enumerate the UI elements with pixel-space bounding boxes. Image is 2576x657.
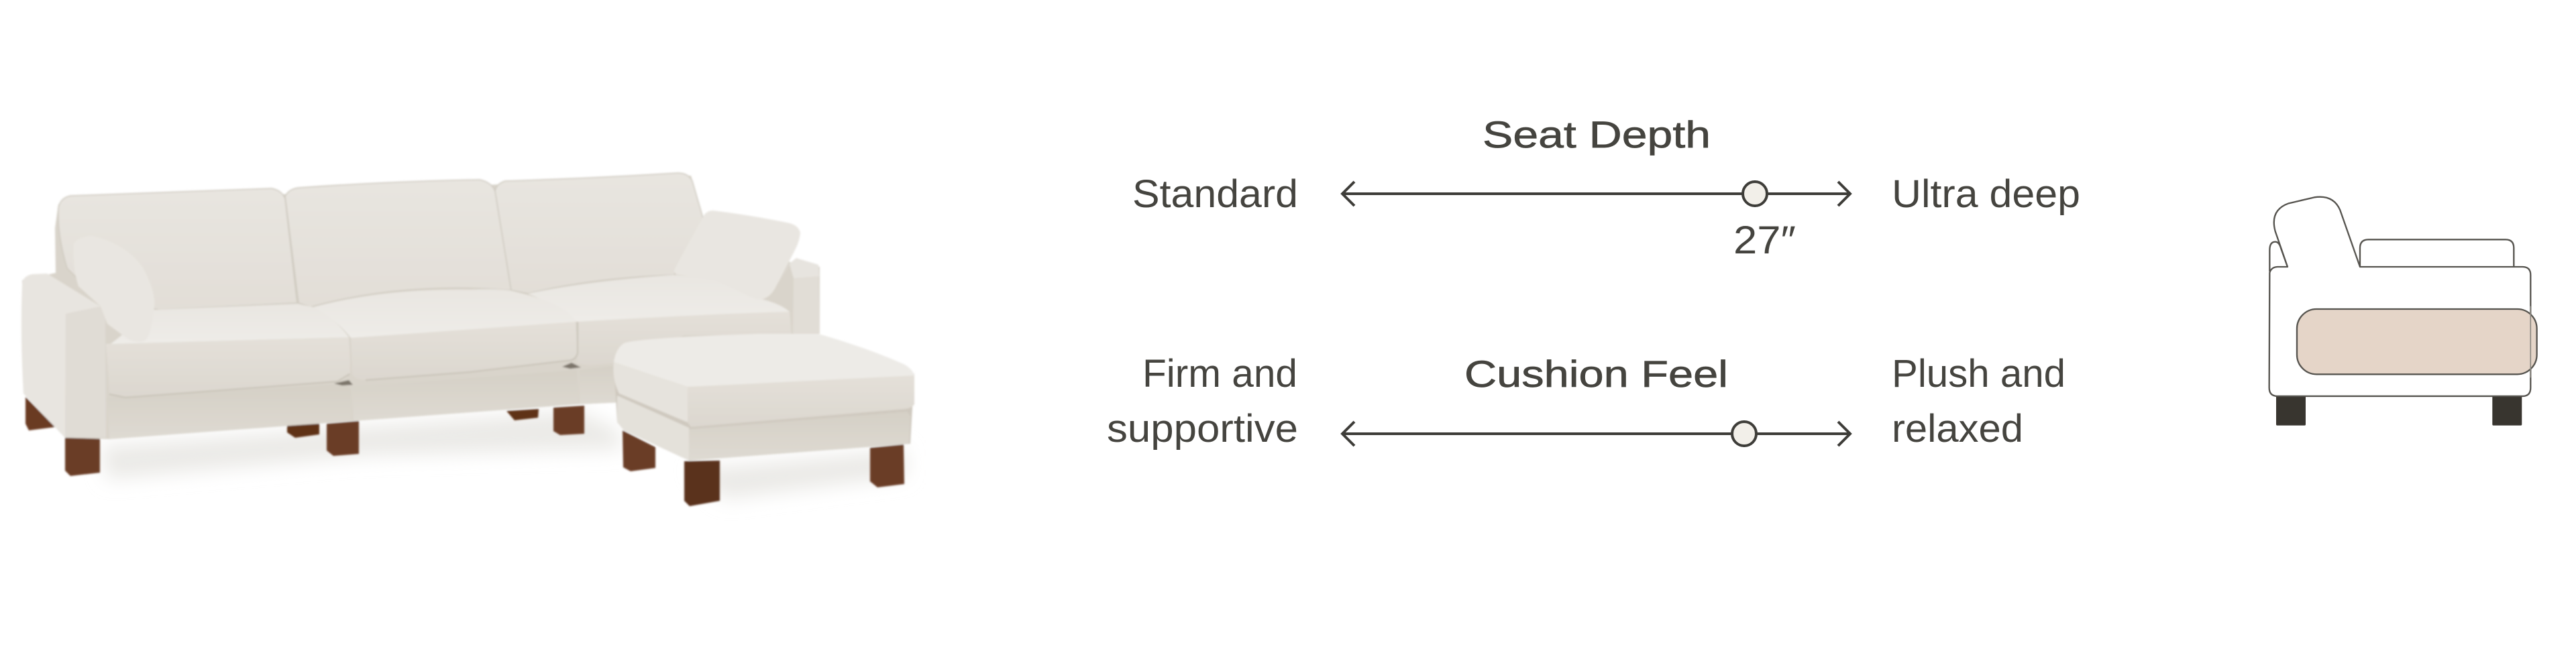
left pillow <box>74 236 154 342</box>
ottoman cushion <box>613 334 914 427</box>
marker: cushion feel position <box>1732 422 1756 446</box>
heading: seat depth: Seat Depth <box>1483 113 1711 156</box>
label: plush and relaxed <box>1892 352 2065 451</box>
sofa right arm <box>771 258 820 334</box>
label: ultra deep: Ultra deep <box>1892 172 2080 216</box>
label: firm and supportive <box>1107 352 1298 451</box>
ottoman base <box>617 396 910 461</box>
left seat cushion <box>106 304 350 398</box>
panel: seat depth scale <box>1132 113 2080 262</box>
marker: seat depth position <box>1743 182 1767 206</box>
sofa back legs <box>25 397 539 438</box>
right pillow <box>674 211 800 300</box>
sofa and ottoman illustration <box>21 173 914 506</box>
icon seat cushion <box>2297 309 2537 374</box>
label: firm and supportive: Firm and <box>1142 352 1297 396</box>
icon legs <box>2276 396 2522 426</box>
sofa back cushions <box>58 173 703 310</box>
arrow: seat depth <box>1342 182 1850 206</box>
value: 27 inches: 27″ <box>1733 219 1796 262</box>
sofa silhouette underlay <box>22 176 820 439</box>
cushion gaps <box>334 363 581 385</box>
icon: sofa side profile with highlighted seat cushion <box>2269 197 2537 426</box>
label: firm and supportive: supportive <box>1107 407 1298 451</box>
label: standard: Standard <box>1132 172 1298 216</box>
icon body outline <box>2269 197 2530 396</box>
right seat cushion <box>528 275 792 365</box>
heading: cushion feel: Cushion Feel <box>1464 353 1728 395</box>
throw pillows <box>74 211 800 342</box>
label: plush and relaxed: Plush and <box>1892 352 2065 396</box>
ottoman underlay <box>614 362 914 461</box>
panel: cushion feel scale <box>1107 352 2065 451</box>
sofa front legs <box>65 406 584 476</box>
label: plush and relaxed: relaxed <box>1892 407 2023 451</box>
middle seat cushion <box>313 289 578 380</box>
sofa left arm <box>21 274 106 438</box>
ottoman legs <box>623 430 904 506</box>
arrow: cushion feel <box>1342 422 1850 446</box>
icon arm line through cushion <box>2529 306 2532 377</box>
sofa bases <box>107 365 624 439</box>
